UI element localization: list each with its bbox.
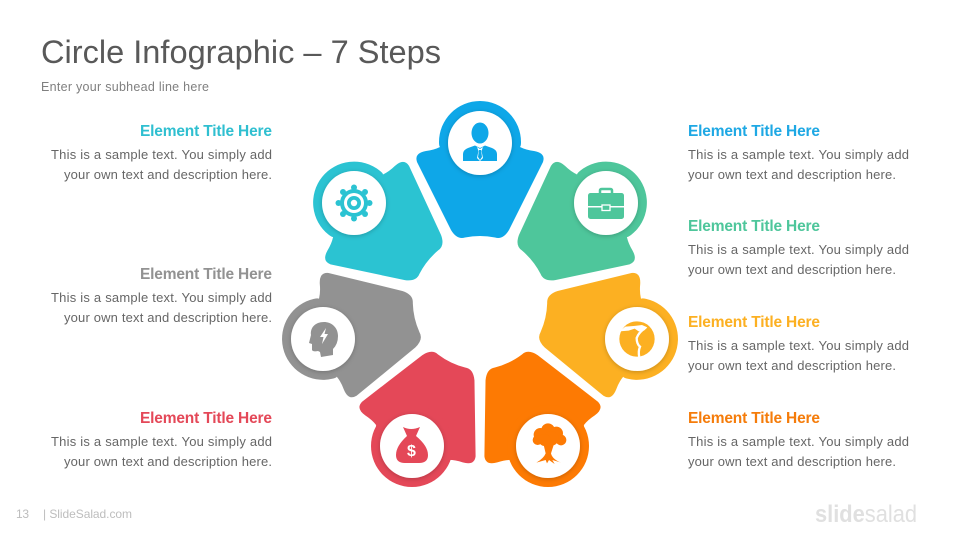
left text: red [51,410,272,469]
right text: green: This is a sample text. You simply add [688,242,909,257]
segment: gray head [269,255,431,410]
icon: briefcase [588,189,624,219]
icon: head with bolt [309,322,338,357]
title: Circle Infographic – 7 Steps [41,34,441,70]
right text: green: Element Title Here [688,218,820,235]
icon: gear [336,184,372,222]
subhead: Enter your subhead line here [41,80,209,94]
left text: gray: your own text and description here. [64,310,272,325]
icon: tree [533,423,566,464]
left text: red: This is a sample text. You simply add [51,434,272,449]
footer: page number and site: | SlideSalad.com [43,507,132,521]
footer: page number and site: 13 [16,507,29,521]
right text: yellow: Element Title Here [688,314,820,331]
left text: red: your own text and description here. [64,454,272,469]
right text: orange: your own text and description here. [688,454,896,469]
right text: orange: Element Title Here [688,410,820,427]
left text: teal [51,123,272,182]
right text: orange [688,410,909,469]
right text: green: your own text and description here. [688,262,896,277]
right text: blue: your own text and description here. [688,167,896,182]
right text: blue: This is a sample text. You simply add [688,147,909,162]
segment: red money bag [353,333,509,487]
icon: businessman [463,122,497,161]
icon: money bag: $ [407,443,416,460]
left text: gray [51,266,272,325]
right text: yellow: your own text and description here. [688,358,896,373]
left text: gray: Element Title Here [140,266,272,283]
right text: blue: Element Title Here [688,123,820,140]
logo: slidesalad: slidesalad [815,501,917,528]
segment: orange tree [451,333,607,487]
right text: green [688,218,909,277]
segment: yellow globe [529,255,691,410]
right text: blue [688,123,909,182]
icon: globe [619,321,655,357]
right text: orange: This is a sample text. You simply add [688,434,909,449]
right text: yellow [688,314,909,373]
segment: green briefcase [491,127,678,312]
left text: teal: Element Title Here [140,123,272,140]
left text: teal: your own text and description here. [64,167,272,182]
segment: teal gear [282,127,469,312]
icon: money bag [396,427,428,463]
segment: blue person [416,101,544,238]
left text: red: Element Title Here [140,410,272,427]
left text: gray: This is a sample text. You simply add [51,290,272,305]
left text: teal: This is a sample text. You simply add [51,147,272,162]
right text: yellow: This is a sample text. You simply add [688,338,909,353]
